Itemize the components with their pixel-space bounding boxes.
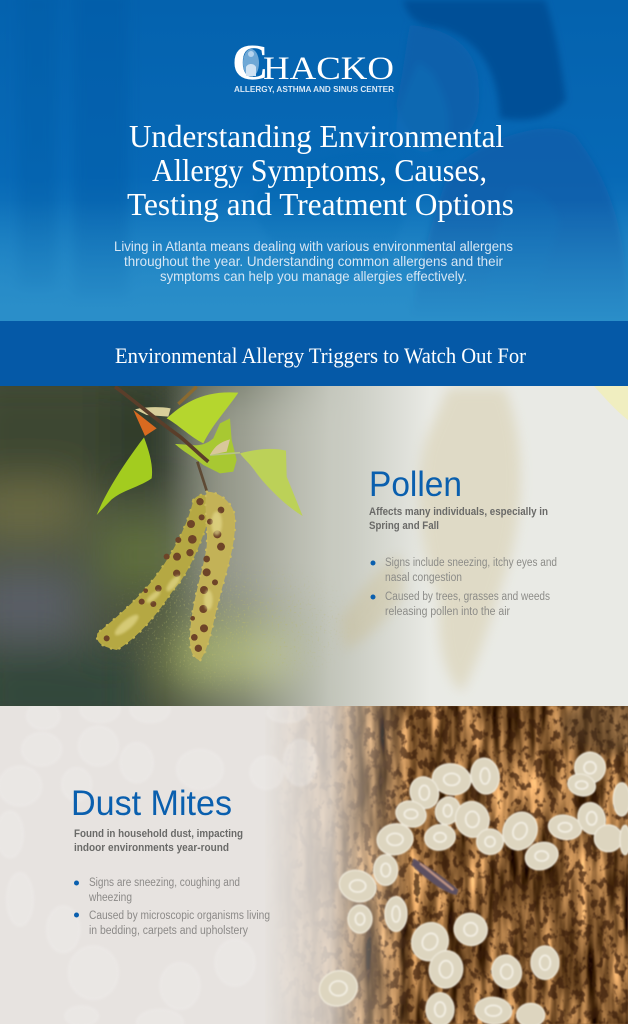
banner heading: Environmental Allergy Triggers to Watch Out For: [115, 343, 527, 368]
panel: pollen: [0, 386, 628, 706]
panel: dust mites: [0, 695, 628, 1024]
title: Understanding Environmental: [129, 118, 504, 154]
intro paragraph: throughout the year. Understanding common allergens and their: [124, 254, 503, 269]
pollen bullet list: Signs include sneezing, itchy eyes and: [385, 557, 557, 569]
woman silhouette: [404, 0, 624, 287]
ghost catkin: [340, 388, 521, 692]
pollen subtitle: Spring and Fall: [369, 520, 439, 532]
pollen subtitle: Affects many individuals, especially in: [369, 506, 548, 518]
catkin left: [97, 495, 209, 650]
ghost mites: [280, 706, 317, 786]
dust mites subtitle: Found in household dust, impacting: [74, 828, 243, 840]
pollen bullet list: nasal congestion: [385, 572, 462, 584]
logo wordmark: HACKO: [263, 51, 394, 87]
dust mites bullet list: Caused by microscopic organisms living: [89, 910, 270, 922]
pollen bullet list: releasing pollen into the air: [385, 606, 510, 618]
dust mites subtitle: indoor environments year-round: [74, 842, 229, 854]
logo: [232, 36, 395, 94]
logo tagline: ALLERGY, ASTHMA AND SINUS CENTER: [234, 84, 395, 94]
yellow leaf corner: [594, 386, 628, 420]
dark corner: [560, 695, 628, 755]
top leaf stem: [178, 387, 197, 404]
pale right side: [165, 386, 628, 706]
title: Testing and Treatment Options: [127, 186, 514, 222]
dust mites subtitle: [74, 828, 243, 854]
dust mites bullet list: in bedding, carpets and upholstery: [89, 925, 248, 937]
dust mites bullet list: [74, 877, 270, 937]
pale left fade: [0, 706, 266, 1024]
dust mites bullet list: wheezing: [88, 892, 132, 904]
wood texture: [300, 706, 628, 1024]
blurred background: [0, 386, 324, 706]
pollen spray: [122, 568, 340, 680]
title: [127, 118, 514, 222]
pollen bullet list: Caused by trees, grasses and weeds: [385, 591, 550, 603]
intro paragraph: Living in Atlanta means dealing with various environmental allergens: [114, 239, 513, 254]
dust mites bullet list: Signs are sneezing, coughing and: [89, 877, 240, 889]
pollen subtitle: [369, 506, 548, 532]
panel: header background: [0, 0, 628, 321]
catkin right: [190, 492, 235, 661]
logo letter C with lungs: C: [232, 36, 269, 92]
mites cluster: [313, 752, 628, 1024]
intro paragraph: [114, 239, 513, 284]
curtain folds: [26, 190, 123, 255]
catkin scales: [104, 498, 225, 652]
section banner: [0, 321, 628, 386]
dust mites heading: Dust Mites: [71, 784, 232, 823]
birch branch: [97, 387, 303, 661]
dark insect: [412, 858, 458, 895]
title: Allergy Symptoms, Causes,: [152, 152, 487, 188]
pollen heading: Pollen: [369, 465, 462, 504]
pollen bullet list: [370, 557, 557, 618]
intro paragraph: symptoms can help you manage allergies effectively.: [160, 269, 467, 284]
